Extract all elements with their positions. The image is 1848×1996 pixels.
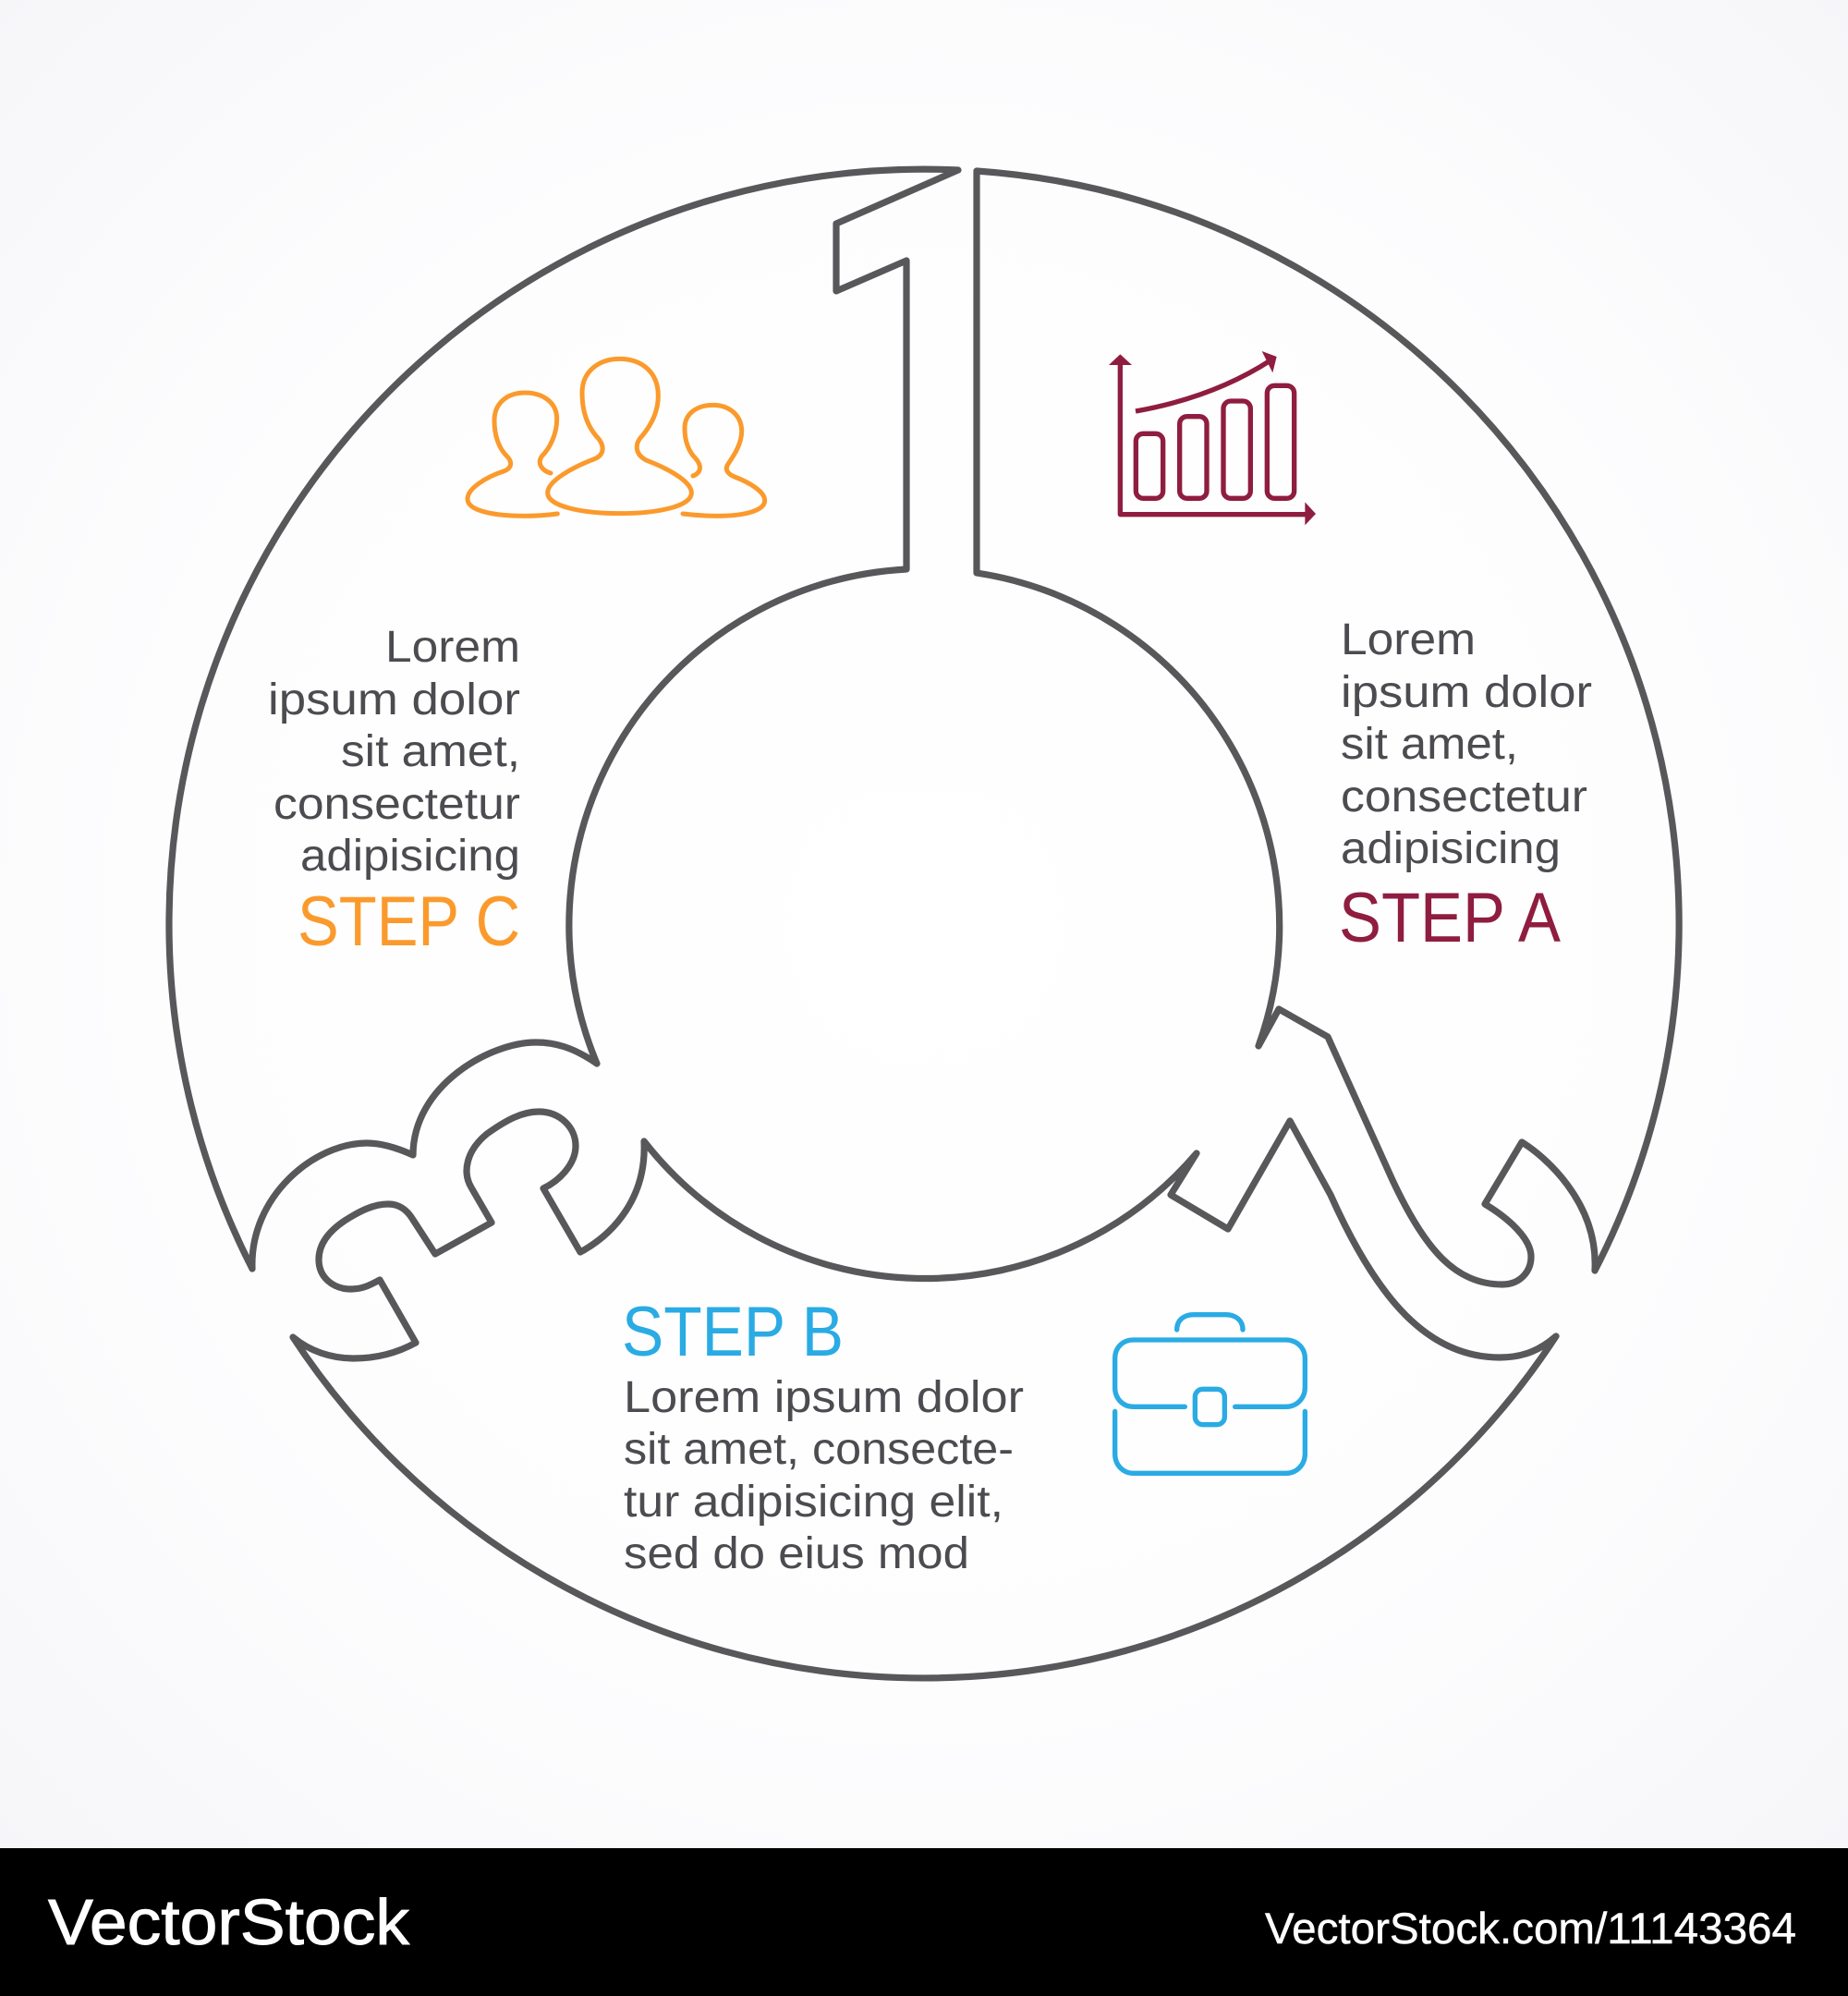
body text: step A: consectetur <box>1341 773 1587 822</box>
segment outline: step A <box>977 171 1679 1284</box>
body text: step C <box>268 623 520 881</box>
body text: step B: Lorem ipsum dolor <box>624 1373 1024 1422</box>
body text: step B: tur adipisicing elit, <box>624 1478 1003 1527</box>
footer wordmark: VectorStock <box>48 1886 410 1958</box>
body text: step C: Lorem <box>385 623 520 672</box>
icon: briefcase <box>1115 1315 1305 1473</box>
body text: step C: sit amet, <box>341 727 520 776</box>
body text: step A: ipsum dolor <box>1341 668 1592 717</box>
text block: step B <box>622 1293 1024 1578</box>
footer image reference: VectorStock.com/11143364 <box>1265 1904 1796 1953</box>
body text: step B: sed do eius mod <box>624 1529 969 1578</box>
segment outline: step C with numeral 1 arrow <box>169 169 958 1269</box>
heading: step A: STEP A <box>1339 879 1561 957</box>
body text: step A: Lorem <box>1341 615 1476 664</box>
body text: step C: consectetur <box>274 780 520 829</box>
text block: step A <box>1339 615 1592 957</box>
segment outline: step B <box>293 1112 1556 1678</box>
body text: step C: ipsum dolor <box>268 675 520 724</box>
body text: step B <box>624 1373 1024 1578</box>
body text: step B: sit amet, consecte- <box>624 1425 1014 1474</box>
icon: growth bar chart <box>1109 351 1316 525</box>
circular diagram outline <box>169 169 1679 1678</box>
text block: step C <box>268 623 520 961</box>
footer bar <box>0 1848 1848 1996</box>
body text: step A <box>1341 615 1592 873</box>
heading: step C: STEP C <box>298 882 520 961</box>
icon: people group <box>468 359 765 516</box>
heading: step B: STEP B <box>622 1293 844 1371</box>
body text: step A: sit amet, <box>1341 720 1518 769</box>
body text: step C: adipisicing <box>300 832 520 881</box>
body text: step A: adipisicing <box>1341 824 1561 873</box>
